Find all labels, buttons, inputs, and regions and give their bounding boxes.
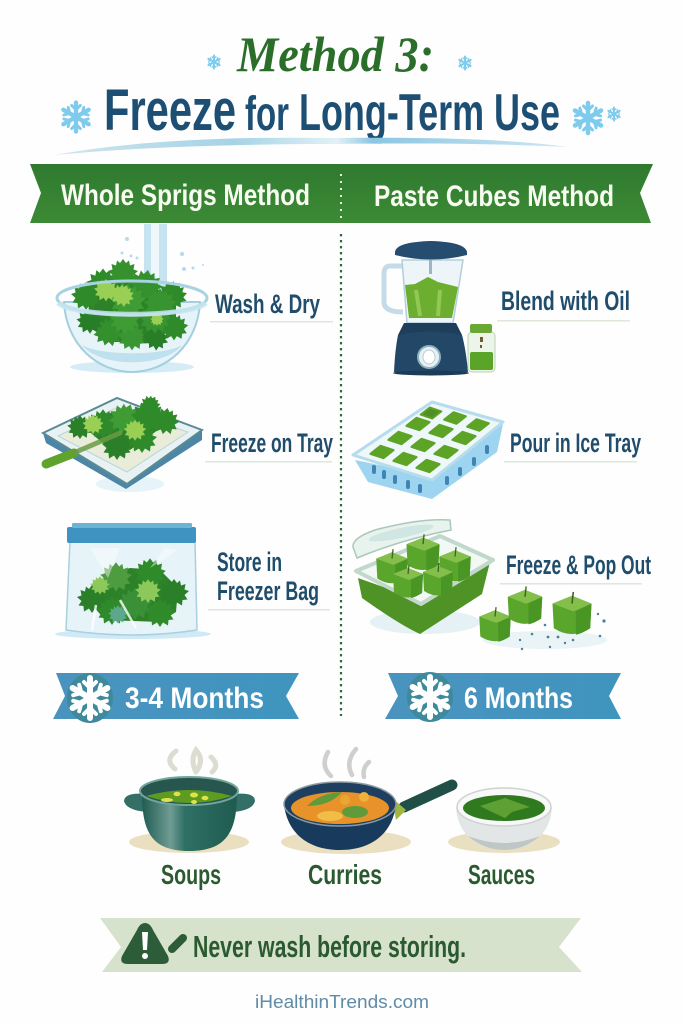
- icon: title snowflakes: [63, 56, 620, 133]
- title: Freeze for Long-Term Use: [104, 78, 560, 143]
- panel: paste cubes steps: [353, 241, 651, 650]
- step label: Store in Freezer Bag: Freezer Bag: [217, 576, 319, 606]
- step label: Freeze on Tray: [205, 428, 333, 462]
- label: Soups: Soups: [161, 859, 221, 890]
- icon: bowl of cilantro under water: [57, 224, 207, 373]
- step label: Blend with Oil: [497, 286, 630, 322]
- green header banner: [30, 164, 653, 223]
- panel: uses: [124, 749, 560, 890]
- icon: sauce bowl: [448, 788, 560, 853]
- step label: Store in Freezer Bag: [208, 547, 330, 610]
- step label: Wash & Dry: Wash & Dry: [215, 289, 320, 319]
- icon: container with frozen cubes: [353, 520, 493, 634]
- center dotted divider: [340, 234, 342, 716]
- warning text: Never wash before storing.: [193, 929, 466, 964]
- warning banner: [100, 918, 582, 972]
- title: Freeze for Long-Term Use: for: [245, 88, 289, 141]
- icon: warning triangle: [121, 923, 183, 964]
- icon: ice cube tray: [353, 402, 503, 499]
- blue banner: 6 Months: [385, 672, 621, 722]
- duration text: 6 Months: [464, 682, 573, 715]
- duration text: 3-4 Months: [125, 682, 264, 715]
- panel: whole sprigs steps: [43, 224, 333, 639]
- label: Sauces: Sauces: [468, 859, 535, 890]
- icon: soup pot: [124, 750, 255, 853]
- step label: Wash & Dry: [210, 289, 333, 322]
- title: Freeze for Long-Term Use: Freeze: [104, 78, 236, 143]
- icon: cilantro on freezer tray: [43, 392, 202, 492]
- icon: snowflake badge: [407, 672, 453, 722]
- icon: blender with oil jar: [384, 241, 495, 376]
- heading: Whole Sprigs Method: Whole Sprigs Method: [61, 179, 310, 212]
- heading: Paste Cubes Method: Paste Cubes Method: [374, 180, 614, 213]
- icon: snowflake badge: [67, 673, 113, 723]
- title swoosh: [54, 138, 568, 155]
- title: Method 3: Method 3:: [236, 26, 434, 82]
- blue banner: 3-4 Months: [53, 673, 299, 723]
- icon: freezer bag of cilantro: [55, 523, 211, 639]
- label: Curries: Curries: [308, 859, 382, 890]
- step label: Store in Freezer Bag: Store in: [217, 547, 282, 577]
- icon: loose frozen cubes: [479, 586, 607, 650]
- step label: Freeze on Tray: Freeze on Tray: [211, 428, 333, 458]
- icon: curry pan: [281, 749, 452, 854]
- step label: Blend with Oil: Blend with Oil: [501, 286, 630, 316]
- footer website: iHealthinTrends.com: [255, 992, 429, 1012]
- title: Freeze for Long-Term Use: Long-Term Use: [299, 84, 560, 142]
- step label: Pour in Ice Tray: [504, 428, 641, 462]
